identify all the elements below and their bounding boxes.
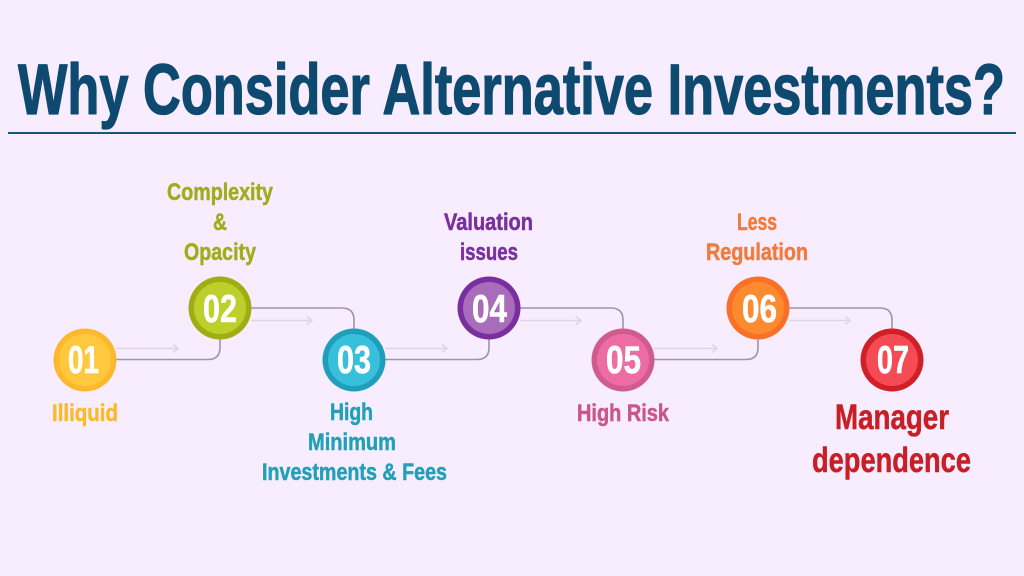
step 07: 07	[877, 339, 909, 382]
step 05: 05	[606, 339, 641, 382]
step 03	[262, 328, 447, 486]
step 02: &	[213, 209, 227, 236]
step 05: High Risk	[577, 400, 670, 427]
step 01: 01	[68, 339, 99, 382]
step 06: 06	[742, 288, 777, 331]
step 03: Minimum	[308, 429, 396, 456]
step 03: High	[330, 399, 373, 426]
connector: 05 to 06	[652, 337, 758, 360]
connector: 02 to 03	[249, 308, 354, 331]
step 02: Opacity	[184, 239, 257, 266]
connectors and arrows	[114, 308, 892, 360]
arrow: 05 to 06	[654, 344, 717, 352]
step 04: 04	[472, 288, 507, 331]
step 04: issues	[460, 239, 518, 266]
arrow: 01 to 02	[116, 344, 178, 352]
step 04	[444, 209, 533, 340]
step 07	[812, 328, 971, 480]
step 06	[706, 209, 808, 340]
step 06: Regulation	[706, 239, 808, 266]
step 06: Less	[737, 209, 777, 236]
connector: 03 to 04	[383, 337, 489, 360]
connector: 04 to 05	[518, 308, 623, 331]
arrow: 03 to 04	[385, 344, 447, 352]
step 05	[577, 328, 670, 427]
step 01: Illiquid	[52, 400, 118, 427]
step 03: Investments & Fees	[262, 459, 447, 486]
step 02: Complexity	[167, 179, 274, 206]
arrow: 02 to 03	[251, 316, 312, 324]
step 03: 03	[337, 339, 371, 382]
arrow: 06 to 07	[789, 316, 850, 324]
step 04: Valuation	[444, 209, 533, 236]
arrow: 04 to 05	[520, 316, 581, 324]
connector: 01 to 02	[114, 337, 220, 360]
step 07: dependence	[812, 441, 971, 480]
step 02: 02	[203, 288, 237, 331]
step 01	[52, 328, 118, 427]
connector: 06 to 07	[787, 308, 892, 331]
step 02	[167, 179, 274, 340]
step 07: Manager	[835, 398, 949, 437]
